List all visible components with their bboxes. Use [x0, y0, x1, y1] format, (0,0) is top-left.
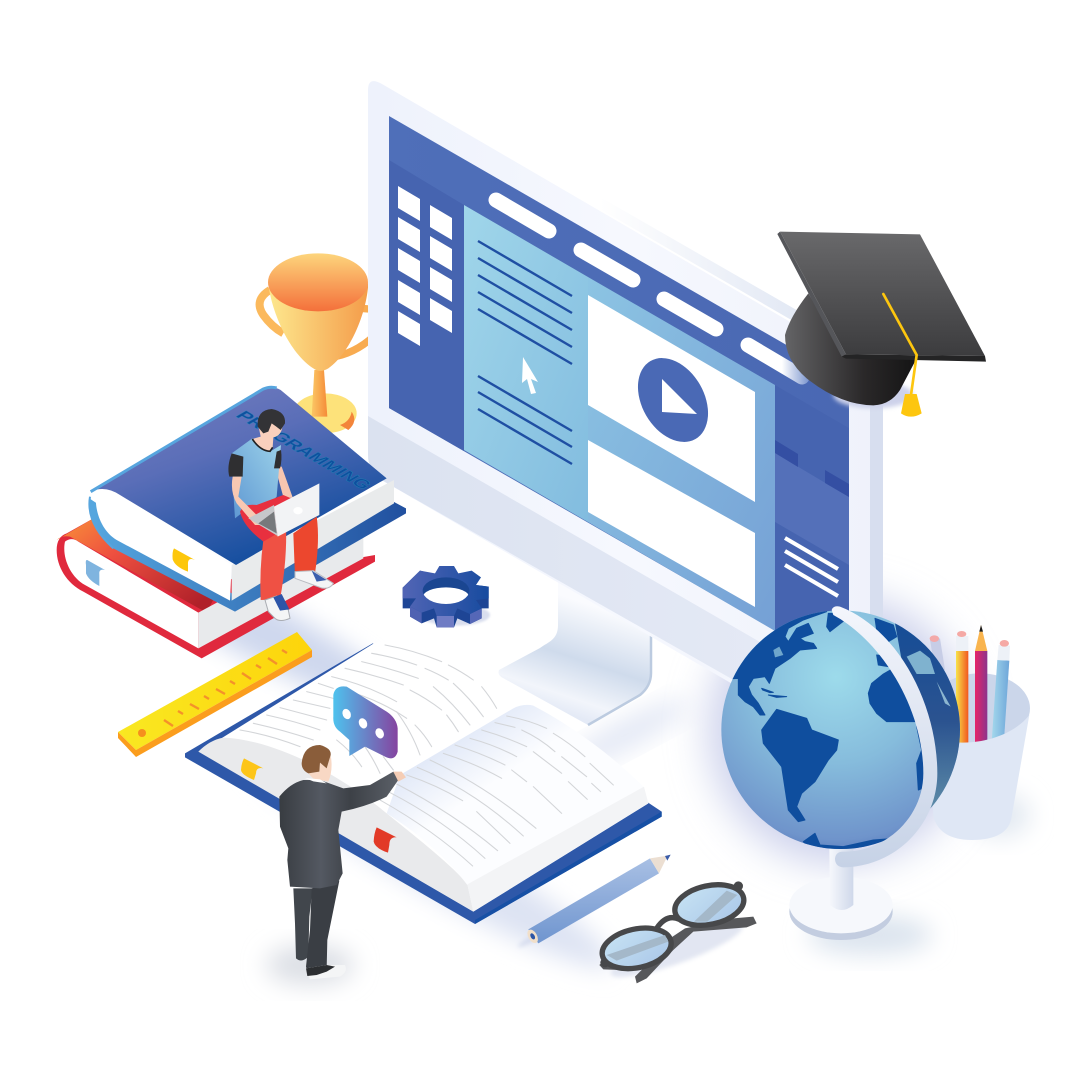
globe [721, 606, 960, 940]
icon: cursor [522, 357, 538, 394]
ruler [118, 632, 312, 757]
lap [240, 495, 295, 542]
light text panel [464, 205, 588, 522]
monitor bezel [368, 81, 883, 700]
video box [588, 295, 755, 502]
north america [732, 611, 828, 716]
sidebar [389, 160, 464, 451]
pencil on table [516, 855, 671, 951]
cap board [780, 232, 985, 356]
east hemisphere [895, 624, 960, 808]
left page lines [240, 645, 497, 773]
right column lines [785, 538, 838, 596]
ruler ticks [164, 650, 287, 726]
lower content box [588, 440, 755, 607]
tassel [883, 294, 917, 395]
europe [875, 618, 897, 642]
monitor top strip [600, 197, 800, 325]
monitor chin [368, 416, 760, 695]
spain [877, 655, 890, 667]
right page lines [380, 716, 613, 866]
jacket [279, 772, 398, 888]
left page [200, 641, 648, 912]
blue book [89, 387, 406, 612]
screen background [389, 116, 849, 673]
bridge [657, 918, 679, 928]
open book [185, 641, 662, 924]
blue book pages [96, 490, 232, 601]
greenland [827, 613, 845, 632]
hand [393, 772, 406, 782]
icon: play button [624, 346, 722, 454]
bookmark: blue [86, 560, 105, 586]
gear side [403, 571, 489, 627]
red book cover [57, 518, 375, 658]
person on books with laptop [228, 409, 333, 620]
icon: trophy [260, 253, 383, 433]
legs [293, 517, 318, 577]
neck and face [308, 755, 332, 782]
legs [293, 888, 313, 960]
cap body [785, 293, 917, 405]
shoes [295, 571, 333, 588]
red book [57, 518, 375, 658]
lens right [671, 879, 748, 931]
glasses [598, 879, 757, 986]
book title: PROGRAMMING [232, 408, 376, 492]
gear hole [423, 577, 469, 604]
open book cover [185, 643, 662, 924]
bookmark: red [374, 827, 397, 853]
blue book bottom cover [89, 498, 406, 612]
content panel [588, 277, 775, 631]
speech bubble icon [333, 686, 398, 758]
gear top [403, 566, 489, 616]
shoe [306, 965, 346, 979]
left page edge [198, 738, 473, 912]
mediterranean [907, 651, 935, 674]
south america [762, 709, 838, 822]
bookmark: yellow [241, 758, 263, 780]
east africa [916, 726, 924, 790]
globe base [789, 883, 893, 940]
head [252, 417, 283, 451]
africa [868, 670, 916, 722]
cup front [930, 715, 1029, 840]
temples [635, 917, 757, 983]
red book pages [64, 539, 198, 648]
blue pencil [992, 660, 1009, 742]
forearm [232, 477, 265, 525]
shirt [232, 438, 281, 518]
sleeves [228, 453, 243, 477]
globe sphere [721, 610, 960, 849]
monitor side edge [870, 392, 883, 680]
bookmark: yellow [172, 548, 195, 572]
text lines [478, 241, 572, 464]
right column [775, 385, 849, 673]
caribbean [762, 688, 773, 693]
graduation cap [777, 232, 986, 417]
globe arm [832, 606, 937, 867]
right page edge [467, 787, 648, 912]
back pencil [930, 638, 945, 670]
monitor stand [498, 575, 651, 725]
orange pencil [956, 651, 968, 746]
header pills [496, 200, 802, 377]
arm [275, 467, 293, 499]
man in suit reading [279, 745, 406, 979]
pencil cup [930, 625, 1030, 840]
magenta pencil [975, 651, 987, 746]
sidebar tiles [398, 186, 452, 346]
cup interior [930, 673, 1030, 743]
illustration: online education scene [56, 81, 1033, 992]
antarctica [802, 832, 888, 849]
monitor [368, 81, 883, 700]
cap board side [777, 232, 846, 357]
hair [302, 745, 331, 773]
soft ground shadows [86, 519, 1030, 991]
lens left [598, 922, 675, 975]
blue book top cover [91, 387, 387, 565]
right page [387, 705, 644, 885]
continents [732, 611, 960, 849]
laptop [248, 505, 278, 536]
globe pole [829, 847, 853, 910]
icon: gear [403, 566, 490, 627]
light patches [773, 647, 783, 657]
